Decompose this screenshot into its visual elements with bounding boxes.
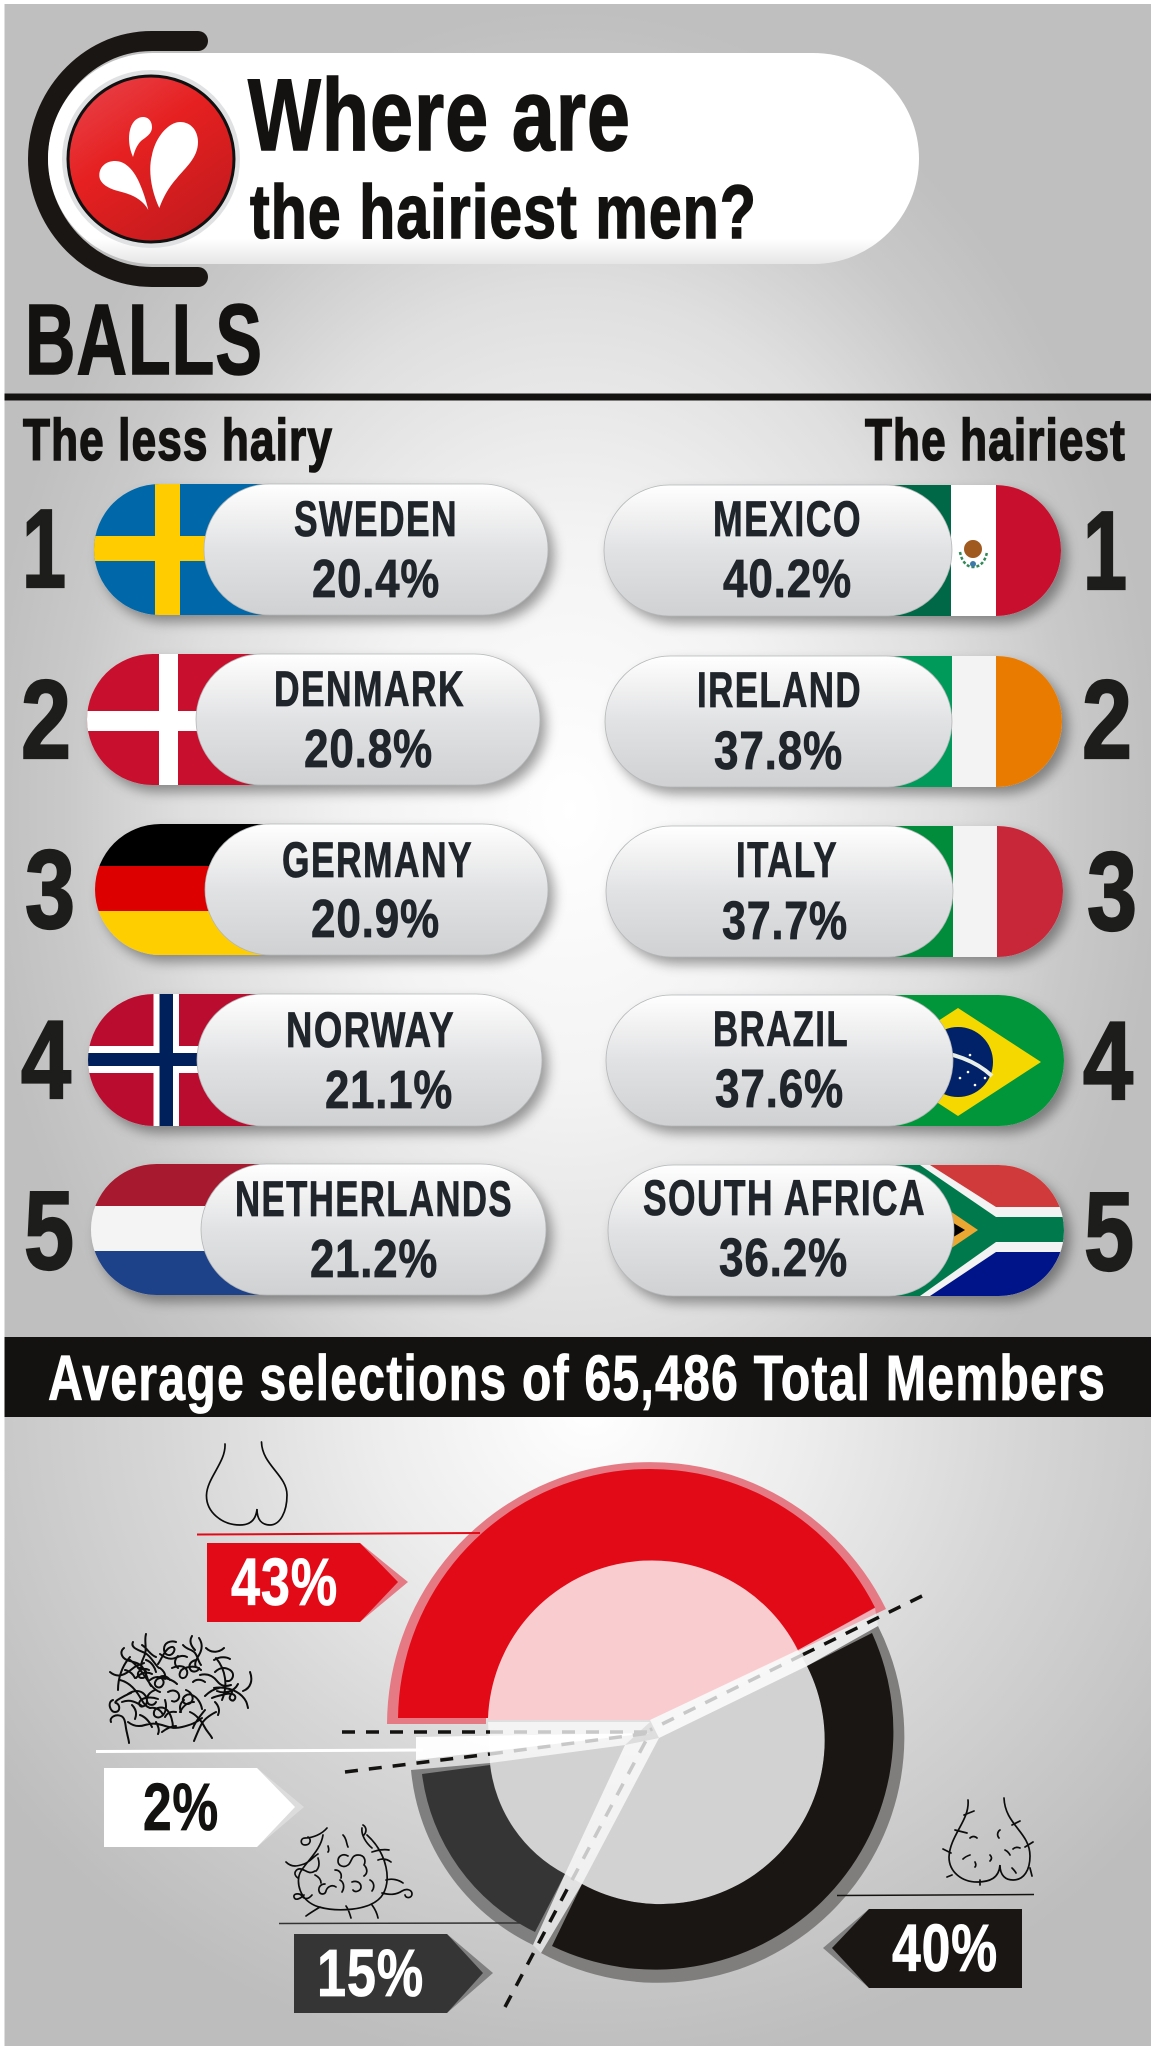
country name: NETHERLANDS [235,1171,513,1227]
percentage: 37.8% [714,721,843,781]
value: 2% [143,1770,219,1845]
row: Brazil [606,995,1133,1126]
header: title badge [38,41,919,277]
flag: Ireland [880,656,1062,787]
rank 5: 5 [1084,1170,1134,1294]
name pill [201,1164,546,1295]
leader line [96,1750,423,1752]
row: Sweden [22,484,548,615]
logo: red circle with white drops [62,70,240,248]
name pill [196,654,540,785]
value: 15% [317,1936,424,2011]
rank 1: 1 [22,487,66,611]
country name: BRAZIL [713,1001,849,1057]
row: Ireland [605,656,1132,787]
leader line [279,1922,520,1924]
rank 1: 1 [1083,489,1127,613]
country name: ITALY [736,832,838,888]
value: 40% [892,1911,998,1986]
country name: SWEDEN [294,491,458,547]
name pill [606,995,953,1126]
callout: 43% [197,1442,480,1622]
arrow tag [207,1543,408,1622]
percentage: 20.9% [311,889,440,949]
segment: 40% slightly hairy [541,1626,904,1983]
icon: very hairy tangle [110,1634,251,1743]
icon: slightly hairy balls [943,1798,1033,1885]
flag: Netherlands [91,1164,259,1295]
section heading: BALLS: BALLS [25,284,263,396]
arrow tag [104,1768,304,1847]
column heading: The less hairy: The less hairy [23,408,333,473]
rank 2: 2 [21,658,71,782]
icon: smooth balls [206,1442,287,1525]
segment: 2% very hairy [416,1733,650,1760]
flag: Brazil [895,995,1064,1126]
percentage: 20.4% [312,549,440,609]
flag: South Africa [880,1165,1064,1296]
dashed separators [342,1596,922,2007]
callout: 40% [823,1798,1034,1988]
percentage: 21.1% [325,1060,453,1120]
flag: Norway [88,994,256,1126]
callout: 15% [279,1825,520,2013]
row: Denmark [21,654,540,785]
percentage: 20.8% [304,719,433,779]
rank 2: 2 [1082,658,1132,782]
country name: IRELAND [697,662,862,718]
leader line [837,1894,1034,1896]
banner: total members [4,1337,1151,1417]
percentage: 37.6% [715,1059,844,1119]
title line 2: the hairiest men? [250,170,757,255]
flag: Sweden [94,484,262,615]
row: South Africa [608,1165,1134,1296]
rank 4: 4 [21,998,71,1122]
percentage: 40.2% [723,549,852,609]
arrow tag [294,1934,493,2013]
flag: Italy [880,826,1063,957]
name pill [204,484,548,615]
black bracket arc [38,41,198,277]
callout: 2% [96,1634,423,1847]
title line 1: Where are [248,58,631,172]
name pill [606,826,953,957]
rank 4: 4 [1083,999,1133,1123]
row: Mexico [604,485,1127,616]
country name: GERMANY [282,832,473,888]
donut chart [342,1462,922,2007]
flag: Germany [95,824,264,955]
percentage: 36.2% [719,1228,848,1288]
rank 3: 3 [25,828,75,952]
name pill [604,485,952,616]
name pill [205,824,548,955]
flag: Mexico [880,485,1062,616]
flag: Denmark [87,654,254,785]
percentage: 21.2% [310,1229,438,1289]
name pill [605,656,952,787]
country name: NORWAY [286,1002,455,1058]
white title pill [48,53,919,264]
row: Italy [606,826,1137,957]
name pill [197,994,542,1126]
country name: DENMARK [274,661,465,717]
name pill [608,1165,954,1296]
arrow tag [823,1909,1022,1988]
icon: hairy ball [286,1825,412,1918]
country name: SOUTH AFRICA [643,1170,926,1226]
rank 3: 3 [1087,830,1137,954]
country name: MEXICO [713,491,862,547]
percentage: 37.7% [722,891,848,951]
row: Germany [25,824,548,955]
segment: 43% hairless [387,1462,886,1724]
value: 43% [231,1545,338,1620]
row: Norway [21,994,542,1126]
rank 5: 5 [24,1169,74,1293]
leader line [197,1533,480,1534]
segment: 15% hairy [411,1745,625,1945]
row: Netherlands [24,1164,546,1295]
